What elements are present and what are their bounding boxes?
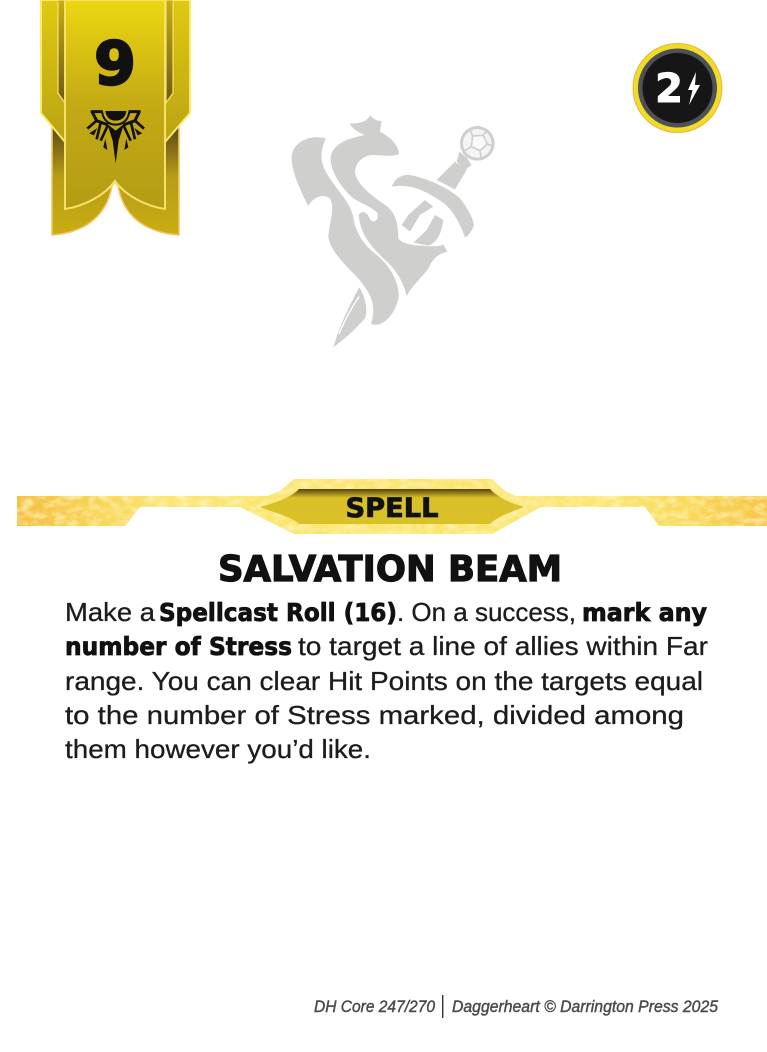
card description (65, 597, 708, 764)
center plate top (240, 479, 541, 507)
banner tails (52, 128, 179, 235)
card description: mark any (582, 598, 707, 627)
level banner (41, 0, 190, 235)
sword grip (437, 162, 467, 189)
card title: SALVATION BEAM (218, 549, 562, 590)
card description: range. You can clear Hit Points on the targets equal (65, 666, 703, 696)
inner plate (260, 489, 524, 524)
card description: to target a line of allies within Far (298, 631, 708, 661)
dragon head and body (331, 115, 447, 296)
sword blade upper (413, 215, 443, 246)
card description: . On a success, (397, 597, 576, 627)
cost badge (633, 44, 722, 132)
domain watermark: dragon and sword (292, 115, 495, 347)
card description: Spellcast Roll (16) (159, 598, 397, 627)
dragon tail and wing (292, 137, 399, 325)
card description: to the number of Stress marked, divided among (65, 700, 684, 730)
card description: them however you’d like. (65, 734, 371, 764)
sword pommel (460, 126, 495, 161)
sword blade tip (333, 287, 366, 347)
card description: number of Stress (65, 632, 292, 661)
sword crossguard (392, 175, 474, 237)
band texture (17, 479, 767, 534)
level number: 9 (94, 29, 136, 99)
banner dark inner strips (58, 0, 173, 103)
icon: stress bolt (688, 72, 700, 105)
card description: Make a (65, 597, 156, 627)
footer credit (314, 995, 718, 1018)
icon: domain sun emblem (87, 111, 144, 163)
footer credit: Daggerheart © Darrington Press 2025 (452, 997, 718, 1016)
cost number: 2 (655, 66, 683, 112)
divider band (17, 479, 767, 534)
banner center panel (65, 0, 165, 209)
footer credit: DH Core 247/270 (314, 997, 435, 1016)
banner outer panel (41, 0, 190, 142)
gold band (17, 496, 767, 534)
type label: SPELL (346, 493, 438, 524)
